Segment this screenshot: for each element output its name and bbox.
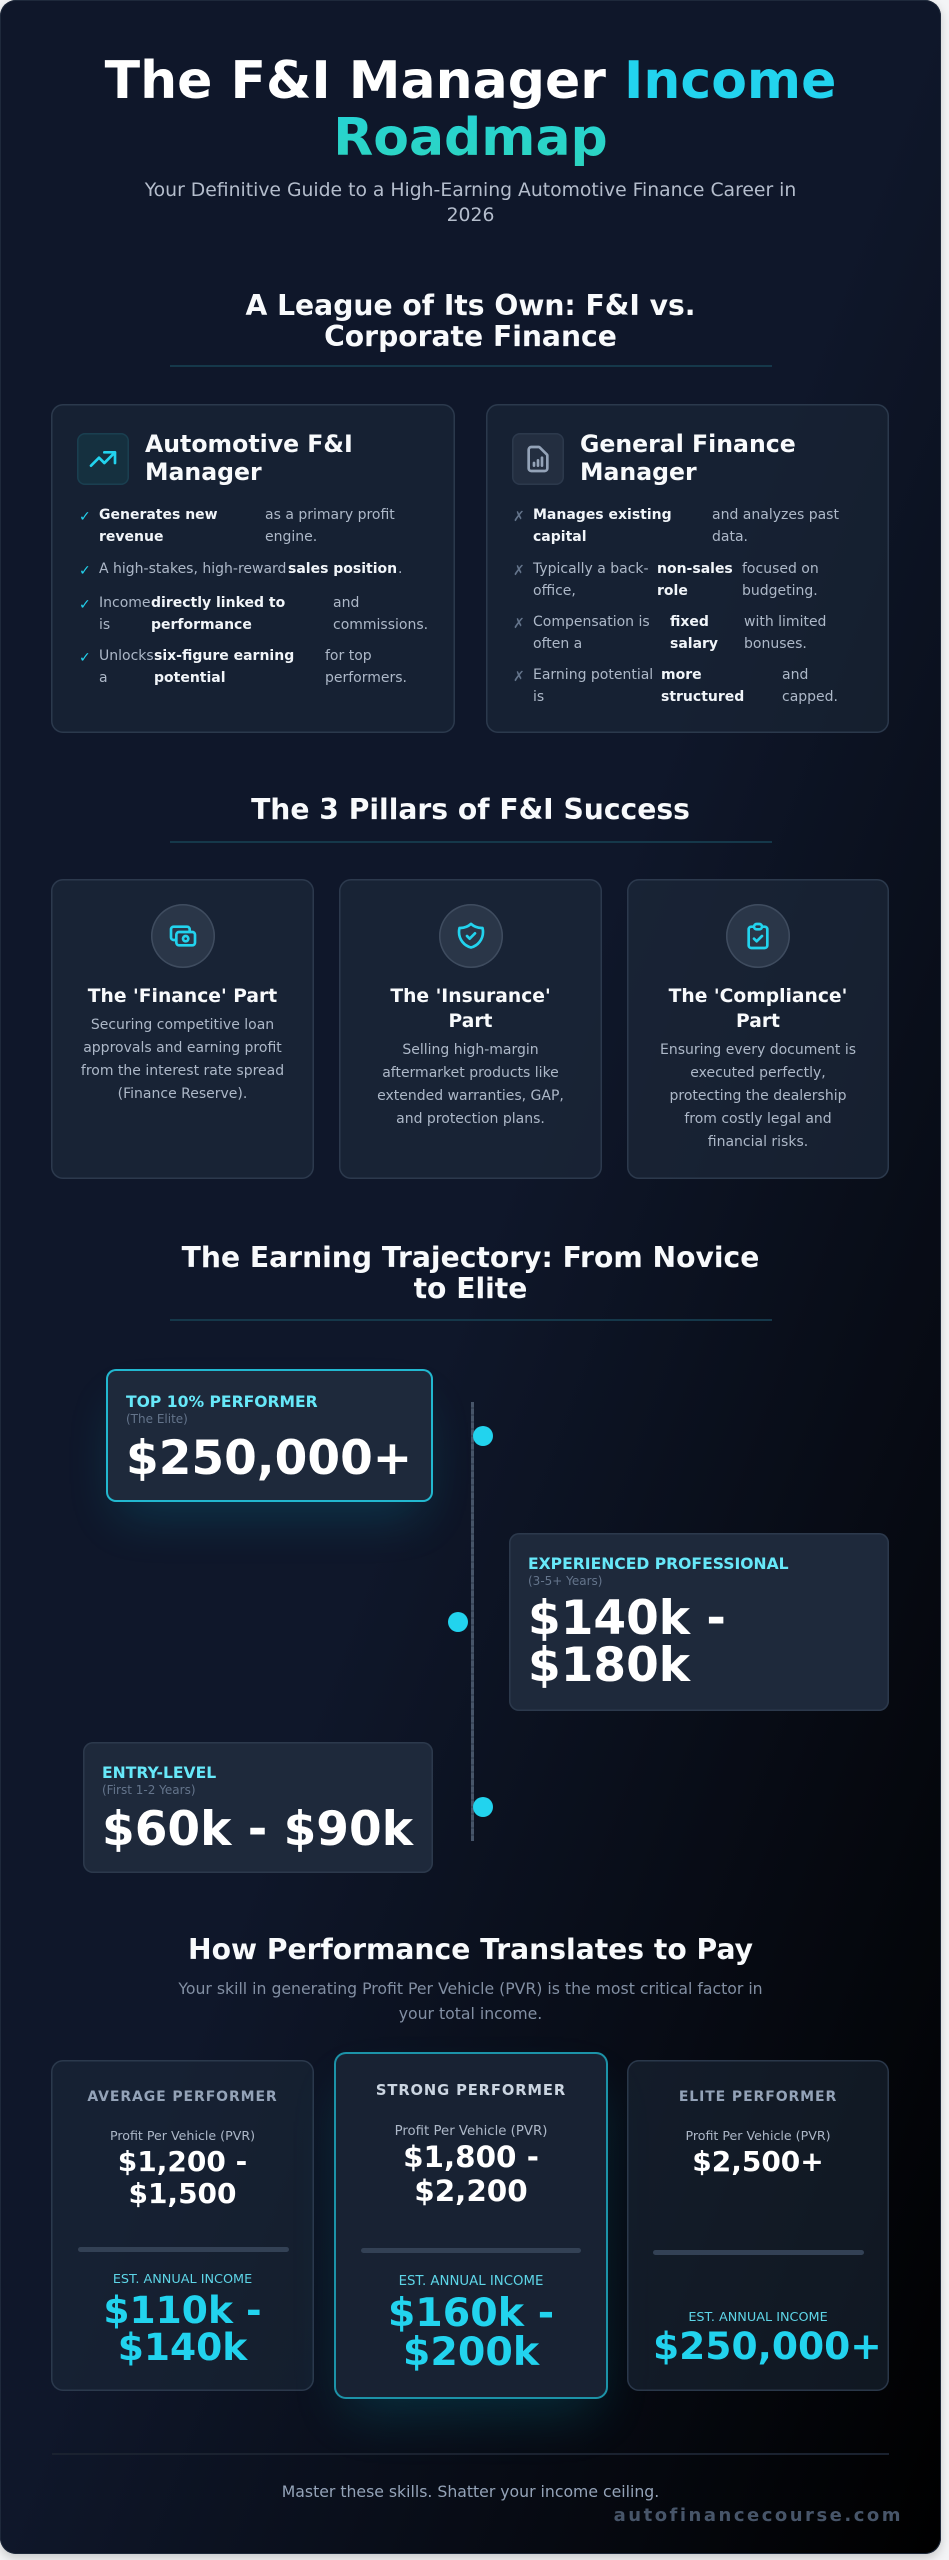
description: finance: Securing competitive loan: [91, 1017, 274, 1033]
heading: earning trajectory: to Elite: [414, 1272, 527, 1305]
heading: 3 pillars: The 3 Pillars of F&I Success: [251, 793, 690, 826]
list: F&I traits: as a primary profit: [265, 507, 395, 523]
heading: general finance manager: [580, 430, 796, 486]
panel: average performer: [51, 2060, 314, 2391]
title: [104, 51, 836, 168]
list: F&I traits: performers.: [325, 670, 407, 686]
label: experienced: EXPERIENCED PROFESSIONAL: [528, 1555, 789, 1573]
list: general finance traits: is: [533, 689, 544, 705]
list: general finance traits: ✗: [513, 563, 525, 579]
heading: general finance manager: Manager: [580, 458, 697, 486]
income label: EST. ANNUAL INCOME: [113, 2272, 252, 2287]
heading: league of its own: A League of Its Own: F&I vs.: [245, 289, 696, 322]
income value: $250,000+: [653, 2324, 882, 2368]
list: general finance traits: more: [661, 667, 702, 683]
list: F&I traits: ✓: [79, 597, 91, 613]
description: insurance: [377, 1042, 564, 1127]
value: 140-180k: $140k -: [528, 1591, 726, 1646]
list: F&I traits: potential: [154, 670, 226, 686]
income value: $200k: [403, 2329, 539, 2375]
list: general finance traits: fixed: [670, 614, 709, 630]
marker: entry level: [473, 1797, 493, 1817]
list: F&I traits: for top: [325, 648, 372, 664]
section intro: [178, 1979, 763, 2022]
income value: [103, 2288, 262, 2369]
icon: clipboard check: [726, 904, 790, 968]
heading: finance: The 'Finance' Part: [88, 986, 277, 1007]
heading: general finance manager: General Finance: [580, 430, 796, 458]
list: F&I traits: Unlocks: [99, 648, 154, 664]
sublabel: elite: (The Elite): [126, 1412, 188, 1426]
PVR label: Profit Per Vehicle (PVR): [110, 2128, 255, 2143]
panel: automotive F&I manager: [51, 404, 455, 733]
list: F&I traits: Generates new: [99, 507, 218, 523]
icon: trending up: [77, 433, 129, 485]
heading: league of its own: [245, 289, 696, 353]
icon: document chart: [512, 433, 564, 485]
PVR label: Profit Per Vehicle (PVR): [685, 2128, 831, 2143]
list: F&I traits: ✓: [79, 650, 91, 666]
heading: compliance: Part: [736, 1011, 780, 1032]
section intro: your total income.: [399, 2004, 542, 2022]
list: general finance traits: Manages existing: [533, 507, 672, 523]
panel: experienced professional: [509, 1533, 889, 1711]
PVR value: $2,500+: [692, 2145, 824, 2178]
list: general finance traits: [513, 507, 839, 705]
list: general finance traits: salary: [670, 636, 718, 652]
list: F&I traits: ✓: [79, 563, 91, 579]
income label: EST. ANNUAL INCOME: [688, 2310, 828, 2325]
PVR label: Profit Per Vehicle (PVR): [395, 2124, 547, 2139]
list: F&I traits: engine.: [265, 529, 317, 545]
list: F&I traits: Income: [99, 595, 151, 611]
tier label: ELITE PERFORMER: [679, 2089, 837, 2105]
description: compliance: [660, 1042, 856, 1150]
list: general finance traits: office,: [533, 583, 576, 599]
subtitle: [144, 180, 796, 226]
icon: shield check: [439, 904, 503, 968]
heading: automotive F&I manager: Manager: [145, 458, 262, 486]
description: compliance: financial risks.: [708, 1134, 808, 1150]
list: general finance traits: ✗: [513, 669, 525, 685]
title: The F&I Manager Income: [105, 51, 836, 111]
list: general finance traits: and: [782, 667, 808, 683]
panel: finance pillar: [51, 879, 314, 1179]
icon: cash: [151, 904, 215, 968]
heading: automotive F&I manager: [145, 430, 353, 486]
list: general finance traits: focused on: [742, 561, 819, 577]
sublabel: years: (3-5+ Years): [528, 1574, 602, 1588]
panel: top 10% performer: [106, 1369, 433, 1502]
panel: strong performer: [334, 2052, 608, 2399]
marker: top performer: [473, 1426, 493, 1446]
PVR value: [118, 2145, 247, 2210]
list: F&I traits: sales position: [288, 561, 397, 577]
description: compliance: Ensuring every document is: [660, 1042, 856, 1058]
panel: insurance pillar: [339, 879, 602, 1179]
panel: entry-level: [83, 1742, 433, 1873]
heading: earning trajectory: The Earning Trajectory: From Novice: [182, 1241, 759, 1274]
description: insurance: Selling high-margin: [402, 1042, 539, 1058]
footer tagline: Master these skills. Shatter your income ceiling.: [282, 2482, 659, 2501]
income value: $110k -: [103, 2288, 262, 2332]
list: F&I traits: revenue: [99, 529, 163, 545]
list: F&I traits: A high-stakes, high-reward: [99, 561, 286, 577]
panel: general finance manager: [486, 404, 889, 733]
list: general finance traits: capped.: [782, 689, 838, 705]
list: F&I traits: ✓: [79, 509, 91, 525]
description: insurance: extended warranties, GAP,: [377, 1088, 564, 1104]
heading: compliance: [668, 986, 847, 1032]
description: finance: approvals and earning profit: [83, 1040, 282, 1056]
label: top 10%: TOP 10% PERFORMER: [126, 1393, 318, 1411]
list: general finance traits: with limited: [744, 614, 826, 630]
heading: performance to pay: How Performance Translates to Pay: [188, 1933, 753, 1966]
list: general finance traits: Typically a back-: [533, 561, 649, 577]
list: general finance traits: and analyzes past: [712, 507, 839, 523]
income value: $160k -: [388, 2290, 554, 2336]
list: F&I traits: and: [333, 595, 359, 611]
tier label: STRONG PERFORMER: [376, 2082, 566, 2099]
list: F&I traits: performance: [151, 617, 252, 633]
list: general finance traits: structured: [661, 689, 744, 705]
PVR value: $1,800 -: [403, 2140, 539, 2174]
sublabel: first years: (First 1-2 Years): [102, 1783, 196, 1797]
list: F&I traits: commissions.: [333, 617, 428, 633]
income value: [388, 2290, 554, 2375]
list: general finance traits: ✗: [513, 509, 525, 525]
PVR value: $1,200 -: [118, 2145, 247, 2178]
PVR value: [403, 2140, 539, 2208]
value: 140-180k: $180k: [528, 1638, 690, 1693]
list: general finance traits: Compensation is: [533, 614, 650, 630]
list: general finance traits: capital: [533, 529, 587, 545]
income label: EST. ANNUAL INCOME: [399, 2274, 543, 2289]
value: 250k: $250,000+: [126, 1431, 412, 1486]
list: F&I traits: .: [398, 561, 402, 577]
description: finance: [81, 1017, 284, 1102]
heading: league of its own: Corporate Finance: [324, 320, 617, 353]
title: Roadmap: [333, 108, 608, 168]
heading: insurance: [390, 986, 551, 1032]
heading: insurance: The 'Insurance': [390, 986, 551, 1007]
income value: $140k: [118, 2325, 247, 2369]
list: general finance traits: Earning potential: [533, 667, 653, 683]
label: entry: ENTRY-LEVEL: [102, 1764, 216, 1782]
description: compliance: protecting the dealership: [670, 1088, 846, 1104]
heading: earning trajectory: [182, 1241, 759, 1305]
description: compliance: from costly legal and: [684, 1111, 832, 1127]
timeline axis: [471, 1402, 474, 1841]
heading: insurance: Part: [448, 1011, 492, 1032]
description: compliance: executed perfectly,: [690, 1065, 826, 1081]
description: finance: from the interest rate spread: [81, 1063, 284, 1079]
marker: experienced: [448, 1612, 468, 1632]
list: F&I traits: is: [99, 617, 110, 633]
list: general finance traits: non-sales: [657, 561, 733, 577]
list: F&I traits: six-figure earning: [154, 648, 294, 664]
description: insurance: and protection plans.: [396, 1111, 545, 1127]
value: 60-90k: $60k - $90k: [102, 1802, 413, 1857]
description: insurance: aftermarket products like: [382, 1065, 559, 1081]
list: F&I traits: a: [99, 670, 108, 686]
panel: elite performer: [627, 2060, 889, 2391]
list: general finance traits: data.: [712, 529, 748, 545]
heading: compliance: The 'Compliance': [669, 986, 847, 1007]
list: general finance traits: budgeting.: [742, 583, 818, 599]
list: general finance traits: role: [657, 583, 688, 599]
value: 140-180k: [528, 1591, 726, 1693]
list: general finance traits: ✗: [513, 616, 525, 632]
heading: automotive F&I manager: Automotive F&I: [145, 430, 353, 458]
tier label: AVERAGE PERFORMER: [87, 2089, 278, 2105]
description: finance: (Finance Reserve).: [118, 1086, 247, 1102]
list: F&I traits: directly linked to: [151, 595, 285, 611]
footer brand: autofinancecourse.com: [614, 2505, 903, 2526]
list: general finance traits: often a: [533, 636, 582, 652]
list: F&I traits: [79, 507, 428, 686]
section intro: Your skill in generating Profit Per Vehicle (PVR) is the most critical factor in: [178, 1979, 763, 1998]
subtitle: Your Definitive Guide to a High-Earning Automotive Finance Career in: [145, 180, 796, 201]
subtitle: 2026: [447, 205, 494, 226]
PVR value: $2,200: [414, 2174, 528, 2208]
panel: compliance pillar: [627, 879, 889, 1179]
PVR value: $1,500: [128, 2177, 237, 2210]
list: general finance traits: bonuses.: [744, 636, 807, 652]
